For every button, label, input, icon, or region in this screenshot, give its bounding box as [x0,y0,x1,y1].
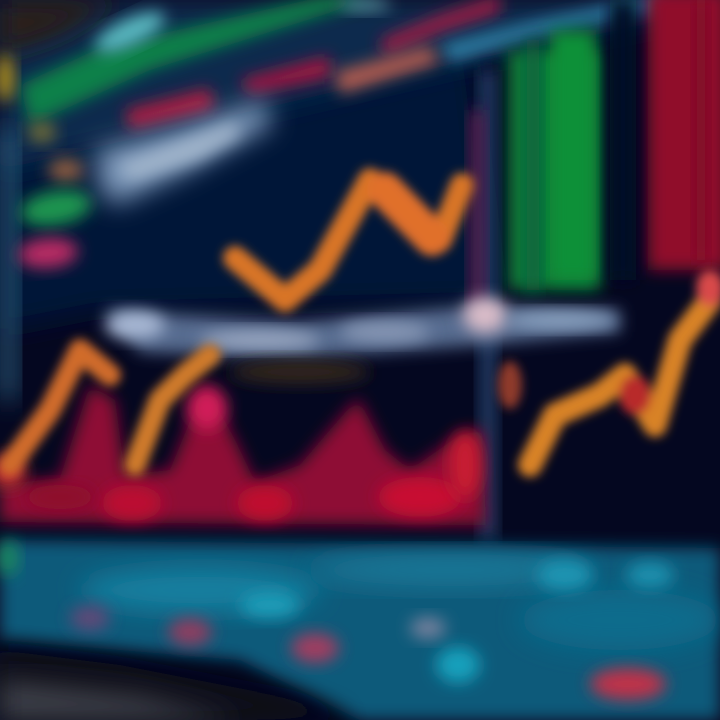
orange line left [10,350,210,465]
upper navy field [0,50,500,330]
white label blob [95,100,272,205]
red column [610,0,720,280]
top band region [0,0,720,170]
bottom teal data panel [0,540,720,720]
bottom dark edge [0,650,350,720]
orange line right [498,270,720,465]
green column [508,30,600,290]
orange line centre [235,180,462,300]
central white band [105,297,620,384]
red lower wave area [0,385,486,525]
left stacked markers [0,121,94,400]
vertical divider [470,70,496,540]
